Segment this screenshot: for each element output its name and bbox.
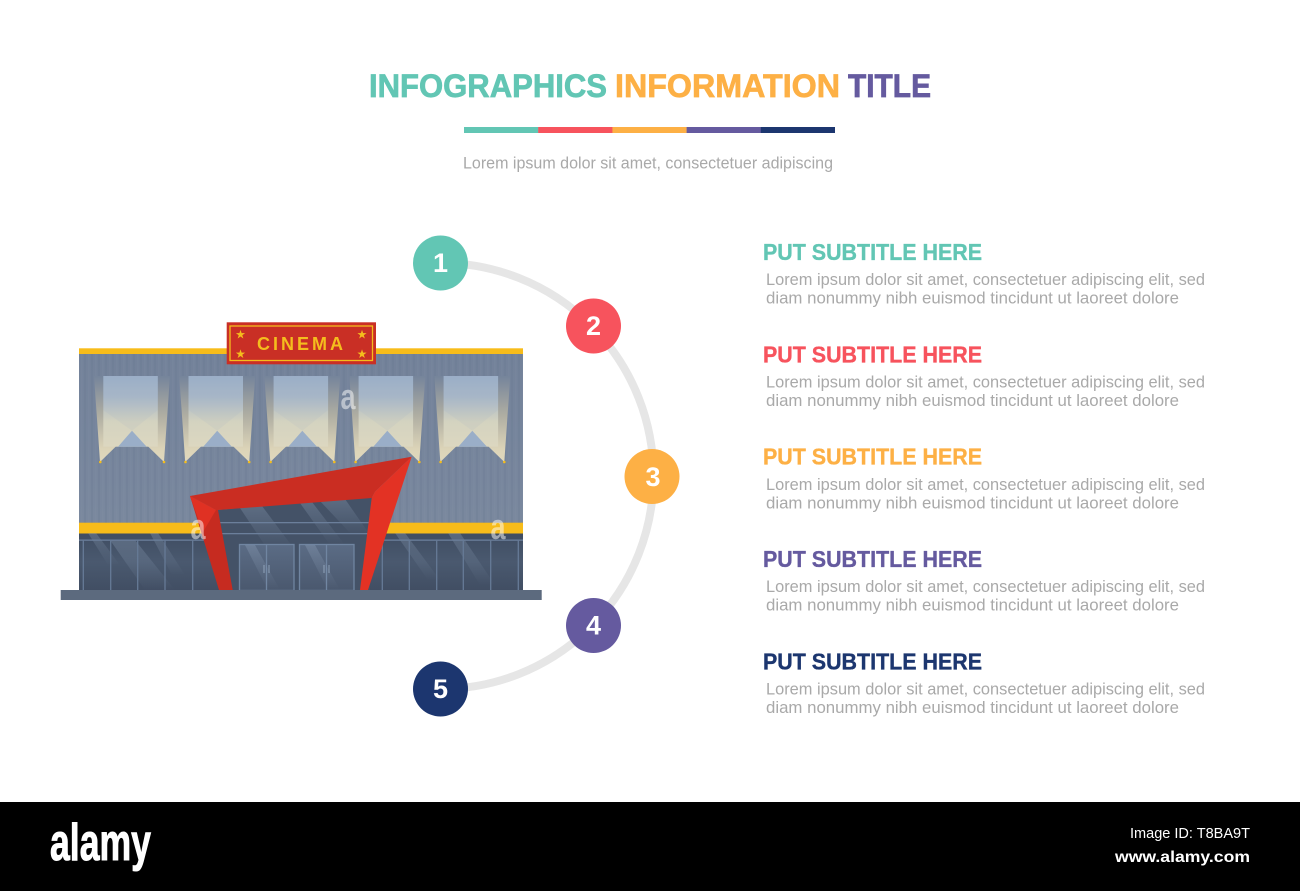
text block 2: PUT SUBTITLE HERE: [763, 341, 982, 367]
text block 2: diam nonummy nibh euismod tincidunt ut laoreet dolore: [766, 392, 1179, 410]
cinema sign: CINEMA: [257, 334, 346, 354]
watermark marks on building: a: [340, 376, 356, 417]
connector arc: [440, 263, 654, 689]
image id: Image ID: T8BA9T: [1130, 825, 1250, 842]
title divider bar: [464, 127, 835, 133]
base slab: [61, 590, 542, 600]
cinema sign: [227, 322, 376, 364]
text block 5: [763, 648, 1205, 717]
entrance glass: [216, 497, 373, 590]
text block 5: Lorem ipsum dolor sit amet, consectetuer adipiscing elit, sed: [766, 680, 1205, 698]
illustration: cinema building: [61, 322, 542, 600]
step marker 1: 1: [433, 248, 448, 278]
step marker 3: [624, 449, 680, 504]
text block 3: diam nonummy nibh euismod tincidunt ut laoreet dolore: [766, 494, 1179, 512]
watermark marks on building: a: [190, 506, 206, 547]
text block 1: PUT SUBTITLE HERE: [763, 239, 982, 265]
step marker 2: [566, 298, 621, 354]
banner windows: [94, 376, 510, 463]
footer logo: alamy: [50, 814, 151, 872]
cinema sign: ★: [357, 328, 367, 342]
title: INFOGRAPHICS: [369, 68, 607, 104]
cinema sign: ★: [357, 347, 367, 361]
text block 4: PUT SUBTITLE HERE: [763, 546, 982, 572]
step marker 3: 3: [645, 462, 661, 492]
text block 2: Lorem ipsum dolor sit amet, consectetuer adipiscing elit, sed: [766, 373, 1205, 391]
footer bar: [0, 802, 1300, 891]
footer url: www.alamy.com: [1114, 849, 1250, 866]
text block 1: Lorem ipsum dolor sit amet, consectetuer adipiscing elit, sed: [766, 271, 1205, 289]
cinema sign: ★: [235, 347, 246, 361]
text block 3: PUT SUBTITLE HERE: [763, 444, 982, 470]
title: INFORMATION: [615, 68, 840, 104]
text block 4: [763, 546, 1205, 615]
step marker 5: 5: [433, 674, 448, 704]
step marker 4: 4: [586, 610, 601, 640]
watermark marks on building: [190, 376, 506, 547]
building wall: [79, 354, 523, 524]
text block 4: Lorem ipsum dolor sit amet, consectetuer adipiscing elit, sed: [766, 578, 1205, 596]
storefront: [79, 533, 523, 590]
red entrance canopy: [190, 457, 412, 590]
text block 2: [763, 341, 1205, 410]
step marker 4: [566, 598, 621, 653]
text block 1: diam nonummy nibh euismod tincidunt ut laoreet dolore: [766, 290, 1179, 308]
text block 5: diam nonummy nibh euismod tincidunt ut laoreet dolore: [766, 699, 1179, 717]
text block 5: PUT SUBTITLE HERE: [763, 648, 982, 674]
title: [369, 68, 931, 104]
step marker 2: 2: [586, 311, 601, 341]
step marker 1: [413, 236, 468, 290]
watermark marks on building: a: [490, 506, 506, 547]
title: TITLE: [848, 68, 931, 104]
text block 3: [763, 444, 1205, 512]
title description: Lorem ipsum dolor sit amet, consectetuer adipiscing: [463, 154, 833, 172]
text block 4: diam nonummy nibh euismod tincidunt ut laoreet dolore: [766, 597, 1179, 615]
cinema sign: ★: [235, 328, 246, 342]
roof trim: [79, 348, 523, 354]
step marker 5: [413, 662, 468, 716]
text block 3: Lorem ipsum dolor sit amet, consectetuer adipiscing elit, sed: [766, 476, 1205, 494]
text block 1: [763, 239, 1205, 308]
entrance doors: [240, 544, 354, 590]
yellow band: [79, 523, 523, 534]
